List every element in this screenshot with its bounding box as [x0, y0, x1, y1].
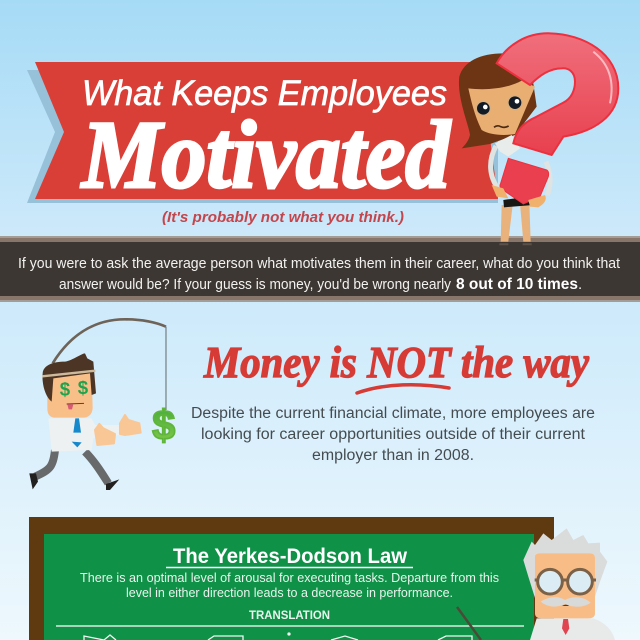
legs	[35, 450, 108, 483]
coat	[530, 618, 615, 640]
man chasing dollar on fishing rod	[29, 319, 175, 490]
title: Motivated: Motivated	[80, 101, 452, 208]
red book	[500, 158, 549, 204]
intro band: .	[578, 276, 582, 293]
nose	[562, 605, 569, 606]
chalk icons	[84, 633, 472, 640]
moustache	[541, 597, 591, 607]
body text: looking for career opportunities outside of their current	[201, 426, 586, 443]
question mark	[497, 33, 618, 155]
hair	[523, 528, 607, 603]
hands	[95, 415, 141, 445]
intro band: 8 out of 10 times	[456, 276, 578, 293]
woman's arms	[491, 146, 550, 195]
chalkboard: level in either direction leads to a decrease in performance.	[126, 585, 453, 600]
hands	[492, 185, 546, 207]
title banner ribbon	[27, 62, 498, 203]
eyes	[476, 101, 491, 116]
chalkboard frame	[29, 517, 554, 640]
fishing line	[164, 327, 168, 410]
board heading: The Yerkes-Dodson Law	[173, 545, 408, 568]
NOT underline swoosh	[357, 385, 449, 393]
board text: There is an optimal level of arousal for executing tasks. Departure from this	[80, 570, 499, 585]
dollar eyes: $	[60, 379, 71, 400]
question mark highlight	[593, 52, 612, 103]
pointer stick	[457, 607, 481, 640]
shirt	[48, 418, 120, 452]
body text	[191, 405, 595, 464]
chalkboard	[44, 534, 534, 640]
glasses	[535, 569, 596, 594]
intro band	[0, 236, 640, 302]
fishing rod	[53, 319, 166, 363]
hair	[42, 353, 96, 402]
title: What Keeps Employees: What Keeps Employees	[82, 74, 447, 113]
woman with question mark	[459, 33, 618, 245]
body text: employer than in 2008.	[312, 447, 474, 464]
woman's legs	[501, 202, 531, 242]
woman's face	[468, 81, 535, 135]
man chasing dollar on fishing rod: $	[78, 377, 89, 398]
subtitle: (It's probably not what you think.)	[162, 209, 404, 226]
woman's hair	[459, 53, 537, 148]
dollar bait: $	[152, 401, 175, 448]
heading: Money is NOT the way: Money is NOT the way	[203, 338, 589, 387]
intro band: answer would be? If your guess is money, you'd be wrong nearly	[59, 276, 451, 293]
body text: Despite the current financial climate, more employees are	[191, 405, 595, 422]
head	[47, 370, 93, 418]
tongue and mouth	[67, 402, 84, 405]
tie	[72, 418, 82, 447]
mouth	[494, 126, 509, 127]
woman's feet shadow	[499, 243, 532, 245]
woman's skirt	[503, 195, 538, 207]
headband	[42, 371, 95, 376]
translation label: TRANSLATION	[249, 608, 330, 622]
shoes	[29, 473, 119, 490]
face	[535, 553, 595, 618]
professor	[523, 528, 615, 640]
woman's collar	[495, 135, 520, 157]
red tie	[562, 619, 569, 635]
